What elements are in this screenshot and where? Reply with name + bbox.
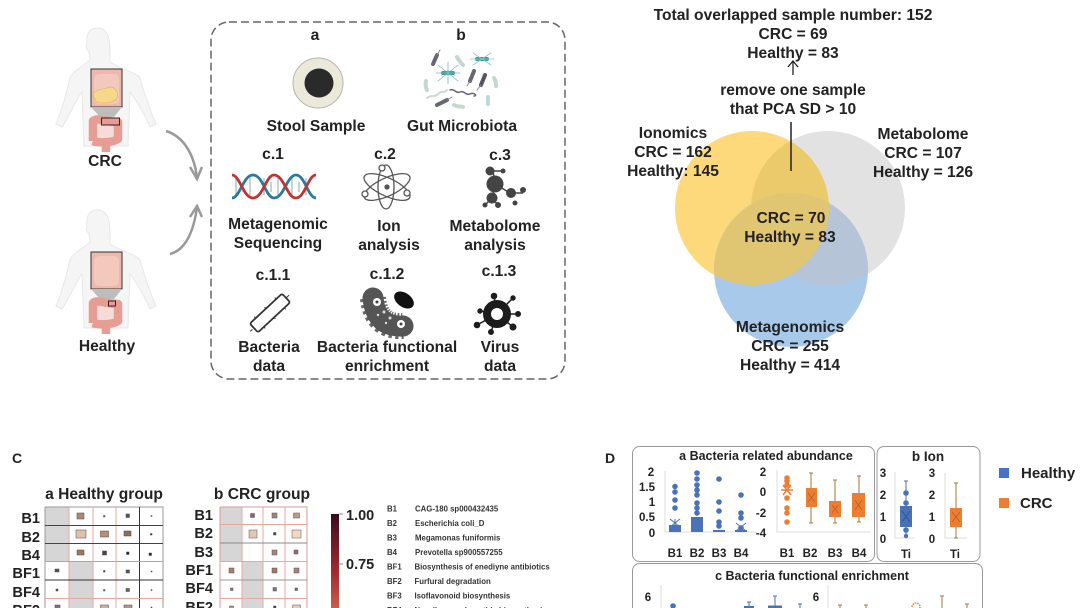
legend: groups: CRC [1020, 495, 1053, 512]
legend: abbreviations: BF2 [387, 577, 402, 586]
colour scale: 1.00 [346, 508, 374, 524]
chart: CRC Ti: 0 [929, 534, 935, 546]
label: ionomics: CRC = 162 [634, 144, 712, 161]
legend: groups: Healthy [1021, 465, 1076, 482]
heatmap row labels: CRC: B3 [194, 545, 213, 561]
heading: total overlapped samples: Healthy = 83 [747, 45, 839, 62]
label: metagenomic sequencing: Metagenomic [228, 216, 328, 233]
chart: healthy abundance: B3 [712, 548, 726, 560]
label: venn centre: Healthy = 83 [744, 229, 836, 246]
legend: abbreviations: Furfural degradation [414, 577, 491, 586]
label: virus data: Virus [481, 339, 520, 356]
legend: abbreviations: Megamonas funiformis [415, 534, 501, 542]
chart: healthy abundance: 1.5 [639, 482, 656, 494]
heading: CRC heatmap: b CRC group [214, 486, 310, 503]
panel label: D: D [605, 450, 615, 466]
icon: stool sample [293, 58, 343, 108]
arrow: Healthy to workflow [170, 206, 202, 254]
label: bacteria data [238, 339, 300, 375]
legend: abbreviations: B2 [387, 519, 398, 528]
chart: healthy abundance: B2 [690, 548, 704, 560]
panel: bacteria functional enrichment [632, 564, 982, 608]
heatmap row labels: healthy: B2 [21, 530, 40, 546]
chart: healthy abundance: 1 [649, 497, 656, 509]
chart: healthy enrichment: 6 [645, 592, 651, 604]
chart: CRC abundance: -2 [756, 508, 766, 520]
panel: sample workflow [211, 22, 565, 379]
label: CRC: CRC [88, 153, 122, 170]
icon: molecule [483, 167, 526, 208]
label: metabolome [873, 126, 973, 181]
pointer line [790, 122, 792, 171]
chart: CRC enrichment [813, 585, 969, 608]
heading: total overlapped samples: Total overlapped sample number: 152 [654, 7, 933, 24]
label: c.1: c.1 [262, 146, 284, 163]
label: bacteria functional enrichment: Bacteria functional [317, 339, 457, 356]
heading: c Bacteria functional enrichment [715, 569, 910, 583]
chart: CRC Ti: Ti [950, 549, 960, 561]
heatmap row labels: healthy: B4 [21, 548, 41, 564]
heatmap: CRC group [220, 507, 307, 608]
heatmap row labels: healthy: B1 [21, 511, 40, 527]
label: metabolome analysis: Metabolome [450, 218, 541, 235]
chart: CRC abundance: B1 [780, 548, 795, 560]
diaphragm [91, 289, 122, 299]
chart: healthy abundance: B4 [734, 548, 749, 560]
legend: abbreviations: CAG-180 sp000432435 [415, 504, 499, 514]
heading: total overlapped samples: CRC = 69 [759, 26, 828, 43]
chart: healthy Ti [880, 468, 915, 561]
heading: a Bacteria related abundance [679, 449, 853, 463]
label: Healthy: Healthy [79, 338, 135, 355]
label: bacteria data: data [253, 358, 285, 375]
chart: healthy enrichment [645, 585, 802, 608]
colon [93, 119, 118, 152]
label: metagenomic sequencing [228, 216, 328, 252]
label: ionomics: Healthy: 145 [627, 163, 719, 180]
label: bacteria data: Bacteria [238, 339, 300, 356]
label: metabolome: Metabolome [878, 126, 969, 143]
chart: CRC abundance [756, 467, 870, 560]
heatmap row labels: CRC: B1 [194, 508, 213, 524]
chart: healthy Ti: Ti [901, 549, 911, 561]
colon detail box [108, 301, 116, 306]
chart: healthy Ti: 1 [880, 512, 887, 524]
tumour [93, 87, 118, 103]
chart: CRC Ti: 3 [929, 468, 935, 480]
heatmap row labels: healthy: BF1 [12, 566, 40, 582]
icon: DNA helix [232, 175, 316, 198]
chart: CRC abundance: 0 [760, 487, 766, 499]
chart: healthy abundance: 2 [648, 467, 654, 479]
heatmap row labels: CRC: BF1 [185, 563, 213, 579]
legend: abbreviations: Biosynthesis of enediyne antibiotics [414, 562, 550, 572]
chart: healthy Ti: 3 [880, 468, 886, 480]
figure: healthy person [56, 210, 156, 334]
label: bacteria functional enrichment: enrichment [345, 358, 429, 375]
legend: abbreviations: B3 [387, 534, 398, 542]
label: metagenomics [736, 319, 844, 374]
chart: healthy abundance: 0 [649, 528, 655, 540]
label: venn centre [744, 210, 836, 246]
body silhouette [56, 210, 156, 328]
legend: abbreviations: Escherichia coli_D [415, 519, 485, 528]
colon [93, 301, 118, 334]
label: virus data: data [484, 358, 516, 375]
chart: healthy abundance: B1 [668, 548, 683, 560]
icon: atom [361, 165, 413, 209]
text: filter step: that PCA SD > 10 [730, 101, 857, 118]
label: stool sample: Stool Sample [267, 118, 366, 135]
legend: abbreviations [387, 504, 550, 608]
body silhouette [56, 28, 156, 146]
label: ion analysis [358, 218, 420, 254]
text: filter step [720, 82, 866, 118]
diaphragm [91, 107, 122, 117]
heatmap row labels: CRC: BF4 [185, 581, 214, 597]
label: metabolome: CRC = 107 [884, 145, 962, 162]
chart: healthy Ti: 2 [880, 490, 886, 502]
colour scale: 0.75 [346, 557, 374, 573]
chest box [91, 252, 122, 289]
legend: abbreviations: B4 [387, 548, 398, 557]
arrow: filter up [788, 61, 798, 75]
legend: abbreviations: Isoflavonoid biosynthesis [414, 592, 511, 600]
heatmap row labels: CRC [185, 508, 214, 608]
legend: abbreviations: Prevotella sp900557255 [415, 548, 503, 557]
label: metabolome: Healthy = 126 [873, 164, 973, 181]
text: filter step: remove one sample [720, 82, 866, 99]
label: ionomics [627, 125, 719, 180]
chart: CRC abundance: B4 [852, 548, 867, 560]
label: c.1.3: c.1.3 [482, 263, 517, 280]
panel label: C: C [12, 450, 22, 466]
label: ionomics: Ionomics [639, 125, 708, 142]
label: metagenomics: CRC = 255 [751, 338, 829, 355]
arrow: CRC to workflow [166, 131, 202, 179]
label: bacteria functional enrichment [317, 339, 457, 375]
chart: healthy abundance [639, 467, 757, 560]
panel: bacteria related abundance [632, 446, 874, 562]
label: ion analysis: Ion [377, 218, 401, 235]
label: metabolome analysis: analysis [464, 237, 526, 254]
heading: healthy heatmap: a Healthy group [45, 486, 163, 503]
heading: b: b [456, 27, 466, 44]
label: metagenomics: Healthy = 414 [740, 357, 840, 374]
label: c.2: c.2 [374, 146, 396, 163]
chart: CRC abundance: B3 [828, 548, 842, 560]
legend: groups [999, 465, 1076, 512]
icon: virus [474, 293, 520, 334]
colour scale [331, 508, 374, 608]
chest box [91, 69, 122, 107]
label: venn centre: CRC = 70 [757, 210, 826, 227]
heatmap: healthy group [45, 507, 163, 608]
label: virus data [481, 339, 520, 375]
colon detail box [102, 118, 120, 125]
chart: CRC enrichment: 6 [813, 592, 819, 604]
chart: CRC abundance: -4 [756, 528, 767, 540]
heatmap row labels: CRC: B2 [194, 526, 213, 542]
chart: CRC Ti: 2 [929, 490, 935, 502]
label: ion analysis: analysis [358, 237, 420, 254]
heading: a: a [311, 27, 320, 44]
chart: CRC Ti: 1 [929, 512, 936, 524]
heatmap row labels: healthy [12, 511, 41, 608]
chart: healthy Ti: 0 [880, 534, 886, 546]
venn diagram [675, 131, 905, 347]
label: metagenomics: Metagenomics [736, 319, 844, 336]
heading: b Ion [912, 449, 944, 464]
legend: abbreviations: BF3 [387, 592, 402, 600]
icon: bacterium rod [245, 289, 294, 337]
chart: CRC abundance: 2 [760, 467, 766, 479]
chart: CRC Ti [929, 468, 967, 561]
icon: gut microbiota [426, 50, 496, 107]
legend: abbreviations: BF1 [387, 562, 402, 572]
legend: abbreviations: B1 [387, 504, 398, 514]
label: metagenomic sequencing: Sequencing [234, 235, 322, 252]
label: c.1.1: c.1.1 [256, 267, 291, 284]
label: c.3: c.3 [489, 147, 511, 164]
label: gut microbiota: Gut Microbiota [407, 118, 517, 135]
chart: healthy abundance: 0.5 [639, 512, 656, 524]
label: metabolome analysis [450, 218, 541, 254]
chart: CRC abundance: B2 [803, 548, 817, 560]
figure: CRC patient [56, 28, 156, 152]
heatmap row labels: healthy: BF4 [12, 585, 41, 601]
icon: functional bacterium [373, 288, 417, 328]
heading: total overlapped samples [654, 7, 933, 62]
label: c.1.2: c.1.2 [370, 266, 405, 283]
panel: ion [877, 446, 980, 562]
